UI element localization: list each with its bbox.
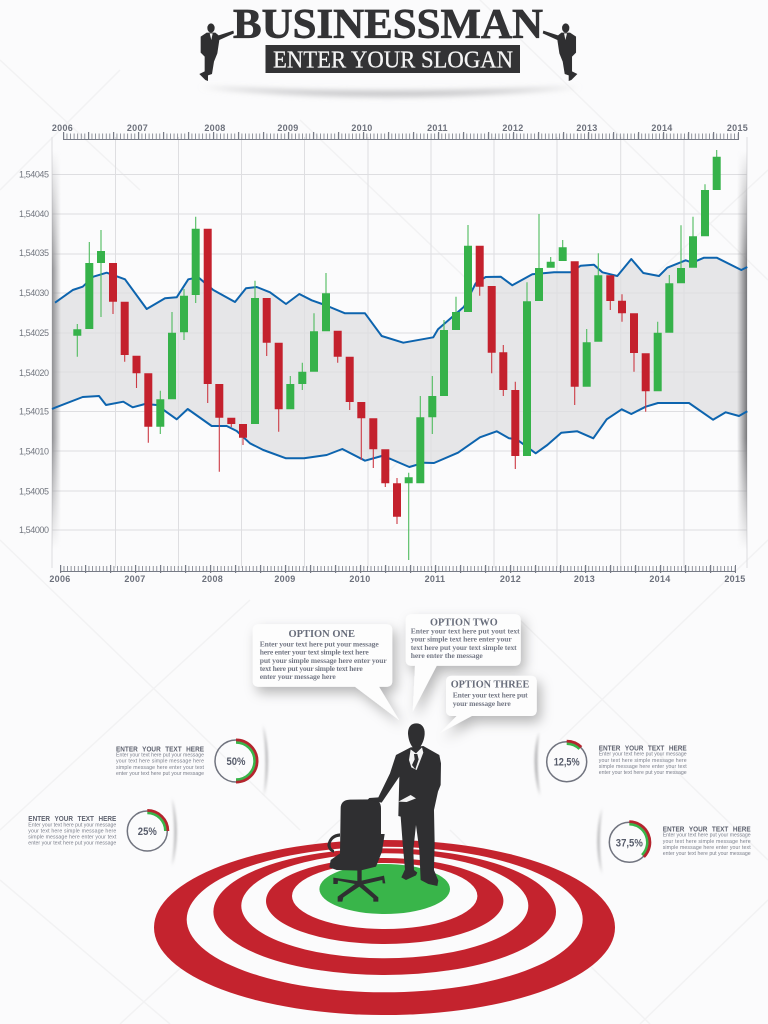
top year labels: 2008	[204, 123, 226, 133]
bubble shape	[440, 676, 537, 733]
y axis labels: 1,54040	[19, 209, 49, 219]
callout: option one: text here put your simple text here	[260, 664, 363, 673]
stat: 37,5%: ENTER YOUR TEXT HERE	[663, 827, 751, 834]
top year labels: 2006	[52, 123, 73, 133]
top year labels: 2009	[277, 123, 299, 133]
callout: option one	[253, 624, 399, 720]
y axis labels: 1,54015	[19, 406, 49, 416]
top year labels: 2014	[651, 123, 673, 133]
y axis labels: 1,54035	[19, 248, 49, 258]
callout: option one: Enter your text here put your message	[260, 640, 379, 648]
callout: option two: your simple text here enter your	[411, 634, 512, 644]
stat: 12,5%: simple message here enter your text	[599, 764, 687, 770]
upper band line	[55, 258, 747, 343]
y axis labels: 1,54005	[19, 486, 49, 496]
top year labels: 2012	[502, 123, 524, 133]
top ruler	[63, 136, 739, 140]
band fill	[52, 258, 747, 467]
red candle bodies	[113, 229, 646, 517]
bottom year labels: 2009	[274, 574, 296, 584]
callout: option two: Enter your text here put yout text	[411, 626, 520, 635]
icon: standing businessman	[367, 723, 441, 886]
stat: 50%	[116, 725, 268, 796]
stat: 25%: simple message here enter your text	[28, 834, 117, 840]
stat: 12,5%: enter your text here put your message	[599, 770, 687, 776]
callout: option one: here enter your text simple text here	[260, 648, 369, 657]
stat: 50%: 50%	[226, 756, 246, 768]
edge shadow right	[737, 150, 747, 550]
y axis labels: 1,54045	[19, 170, 49, 180]
stat: 25%: your text here simple message here	[28, 828, 116, 834]
icon: leaning businessman right	[543, 23, 577, 81]
title: BUSINESSMAN	[233, 2, 543, 48]
bottom year labels: 2008	[202, 574, 223, 584]
top year labels: 2010	[351, 123, 373, 133]
bottom ruler	[60, 569, 736, 572]
callout: option one: OPTION ONE	[288, 629, 355, 640]
stat: 12,5%: Enter your text here put your message	[599, 752, 687, 758]
stat: 25%: enter your text here put your message	[28, 840, 116, 846]
bottom year labels: 2010	[349, 574, 371, 584]
top year labels: 2015	[727, 123, 748, 133]
stat: 37,5%	[598, 808, 751, 874]
stat: 37,5%: simple message here enter your text	[663, 845, 751, 851]
green candle wicks	[77, 150, 717, 560]
stat: 25%: Enter your text here put your message	[28, 822, 116, 828]
icon: office chair	[327, 799, 385, 902]
callout: option two: text here put your text simple text	[411, 643, 517, 652]
top year labels: 2013	[576, 123, 598, 133]
stat: 50%: enter your text here put your message	[116, 771, 204, 777]
bottom year labels: 2007	[124, 574, 146, 584]
y axis labels: 1,54020	[19, 368, 49, 378]
stat: 37,5%: your text here simple message here	[663, 839, 751, 845]
stat: 12,5%: 12,5%	[554, 757, 580, 769]
bottom year labels: 2006	[49, 574, 71, 584]
bottom year labels: 2013	[574, 574, 595, 584]
stat: 12,5%: ENTER YOUR TEXT HERE	[599, 746, 687, 753]
stat: 25%	[28, 798, 176, 866]
stat: 37,5%: enter your text here put your message	[663, 851, 751, 857]
green candle bodies	[77, 157, 717, 483]
stat: 37,5%: Enter your text here put your message	[663, 833, 751, 839]
y axis labels: 1,54025	[19, 328, 49, 338]
stat: 25%: ENTER YOUR TEXT HERE	[28, 816, 117, 823]
target: concentric rings	[154, 840, 615, 1015]
y axis labels	[19, 170, 49, 535]
callout: option three: your message here	[453, 699, 511, 708]
edge shadow left	[52, 160, 60, 540]
callout: option three	[440, 676, 537, 733]
bottom year labels: 2014	[649, 574, 671, 584]
bubble shape	[253, 624, 399, 720]
callout: option three: OPTION THREE	[451, 680, 529, 691]
top year labels: 2007	[127, 123, 148, 133]
y axis labels: 1,54030	[19, 288, 49, 298]
bottom year labels: 2012	[500, 574, 521, 584]
bubble shape	[406, 614, 521, 712]
stat: 50%: ENTER YOUR TEXT HERE	[116, 746, 204, 754]
stat: 50%: Enter your text here put your message	[116, 753, 204, 759]
y axis labels: 1,54000	[19, 525, 49, 535]
callout: option two: OPTION TWO	[430, 618, 498, 629]
target centre green	[319, 864, 450, 914]
y axis labels: 1,54010	[19, 446, 49, 456]
callout: option two: here enter the message	[411, 651, 483, 660]
callout: option one: put your simple message here enter your	[260, 656, 387, 665]
title shadow	[200, 87, 580, 96]
callout: option two	[406, 614, 521, 712]
top year labels: 2011	[427, 123, 448, 133]
red candle wicks	[113, 286, 646, 524]
bottom year labels: 2015	[724, 574, 746, 584]
bottom year labels: 2011	[425, 574, 445, 584]
icon: leaning businessman left	[199, 23, 234, 81]
stat: 37,5%: 37,5%	[616, 837, 643, 849]
lower band line	[52, 396, 747, 467]
top year labels	[52, 123, 748, 133]
header: title block	[199, 2, 580, 96]
panel: candlestick chart	[19, 123, 748, 584]
callout: option one: enter your message here	[260, 672, 336, 681]
bottom year labels	[49, 574, 746, 584]
stat: 50%: simple message here enter your text	[116, 765, 205, 771]
stat: 12,5%: your text here simple message here	[599, 758, 687, 764]
stat: 50%: your text here simple message here	[116, 759, 204, 765]
stat: 25%: 25%	[138, 826, 157, 838]
callout: option three: Enter your text here put	[453, 691, 528, 700]
stat: 12,5%	[535, 732, 687, 796]
slogan bar: ENTER YOUR SLOGAN	[273, 48, 513, 74]
